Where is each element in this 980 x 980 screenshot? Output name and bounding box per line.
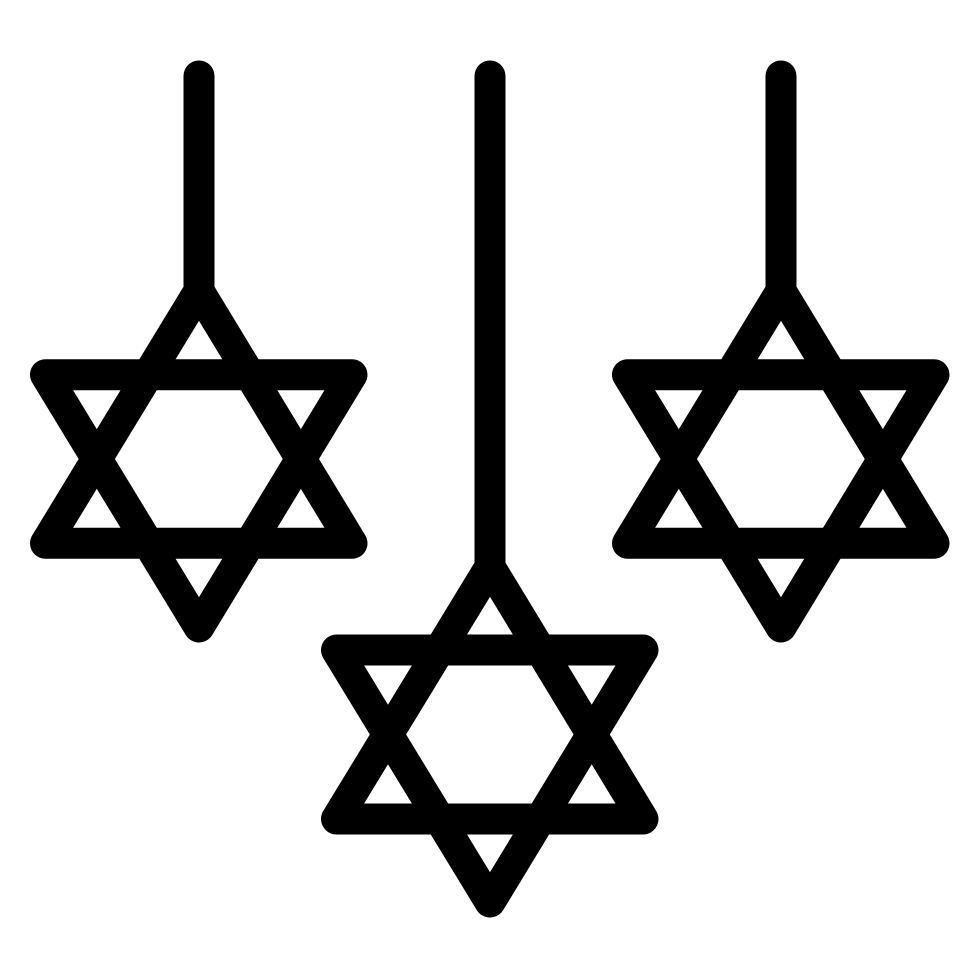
- icon: left hanging star: [46, 76, 352, 627]
- icon: center hanging star: [336, 76, 643, 902]
- icon: right hanging star: [628, 76, 934, 627]
